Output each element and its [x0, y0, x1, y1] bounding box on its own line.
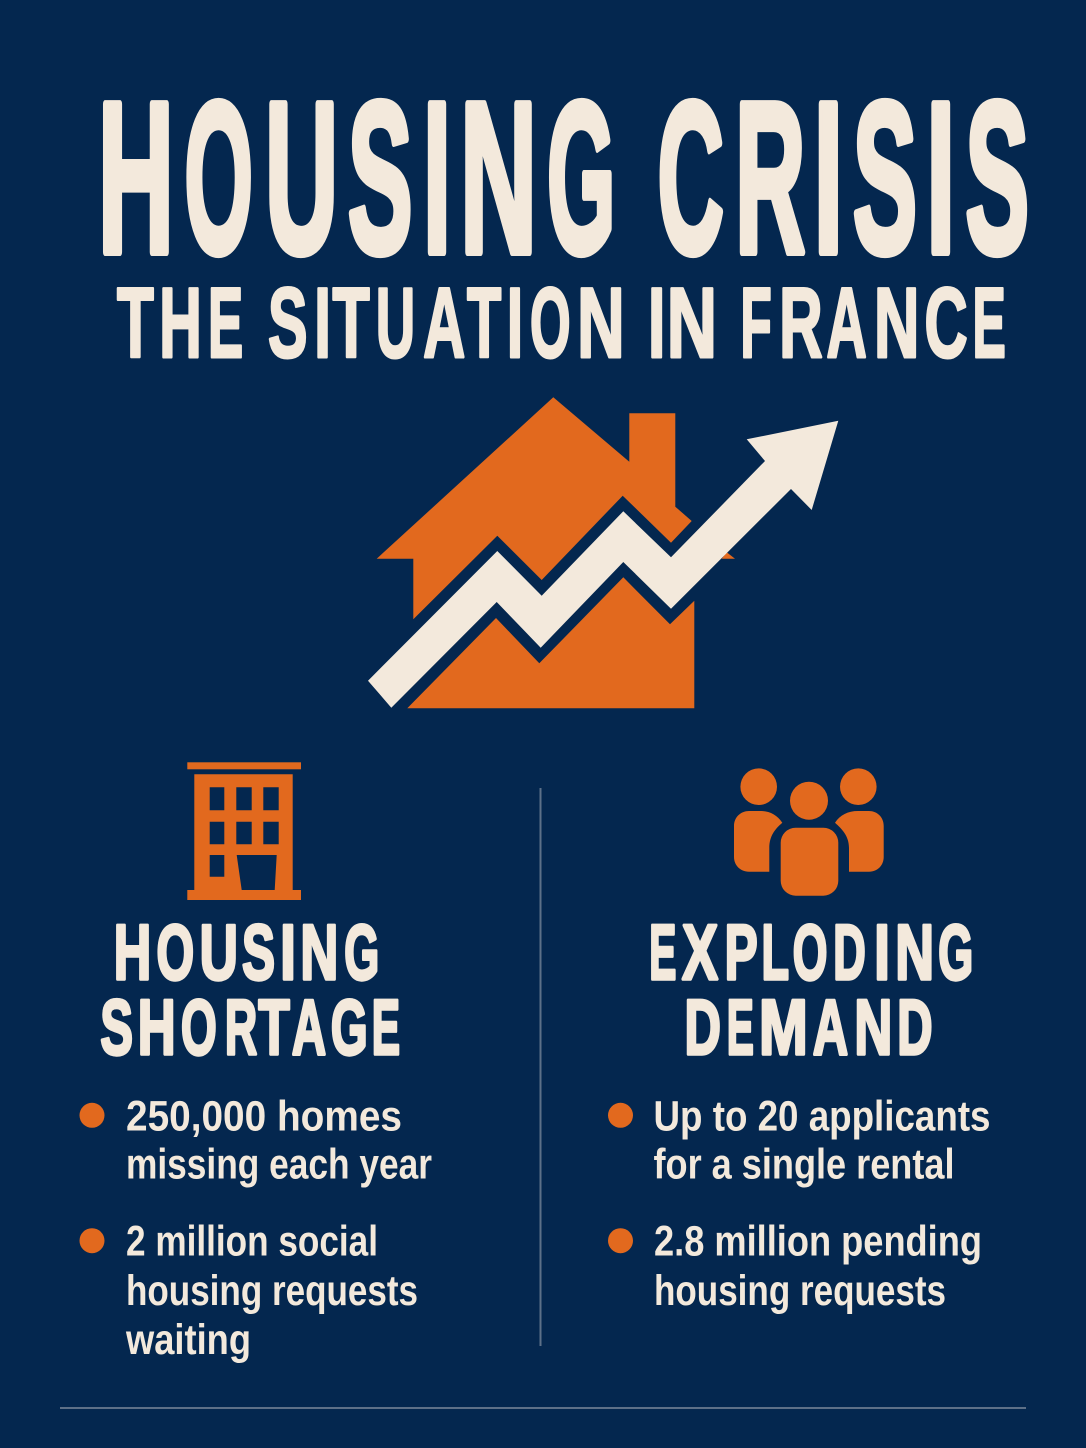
fact 2: housing requests — [126, 1267, 418, 1315]
section heading: exploding demand: N — [854, 983, 892, 1071]
subtitle — [117, 267, 1006, 378]
title: C — [658, 57, 724, 298]
fact 2: 2.8 million pending — [654, 1218, 982, 1266]
title: I — [926, 57, 955, 298]
fact 1: missing each year — [126, 1140, 432, 1188]
icon: house with rising arrow — [368, 397, 838, 708]
section heading: housing shortage: A — [292, 983, 326, 1071]
subtitle: O — [530, 267, 571, 378]
section heading: exploding demand: D — [684, 983, 721, 1071]
subtitle: E — [972, 267, 1006, 378]
section heading: exploding demand: X — [682, 908, 718, 996]
title: S — [853, 57, 917, 298]
section heading: housing shortage: U — [200, 908, 238, 996]
house eave tip — [722, 552, 735, 559]
subtitle: C — [924, 267, 968, 378]
fact 2: housing requests — [654, 1267, 946, 1315]
section heading: housing shortage: I — [280, 908, 296, 996]
section heading: housing shortage: G — [344, 908, 379, 996]
subtitle: E — [208, 267, 243, 378]
bullet 1 — [80, 1103, 104, 1128]
bullet 2 — [80, 1228, 104, 1253]
title: U — [265, 57, 338, 298]
fact 1: 250,000 homes — [126, 1093, 402, 1141]
rising arrow — [368, 421, 838, 708]
fact 2: 2 million social — [126, 1218, 378, 1266]
fact 1: Up to 20 applicants — [654, 1093, 990, 1141]
subtitle: U — [376, 267, 415, 378]
fact 2: waiting — [125, 1316, 251, 1364]
section heading: exploding demand: P — [725, 908, 758, 996]
section heading: exploding demand: A — [813, 983, 848, 1071]
section heading: exploding demand: E — [649, 908, 676, 996]
fact 2 — [654, 1218, 982, 1315]
section heading: housing shortage: N — [300, 908, 338, 996]
section heading: housing shortage: H — [138, 983, 176, 1071]
section heading: exploding demand: D — [833, 908, 866, 996]
icon: apartment building — [187, 762, 301, 900]
section heading: housing shortage: E — [372, 983, 400, 1071]
section heading: exploding demand: M — [759, 983, 808, 1071]
list: exploding demand facts — [608, 1093, 990, 1315]
fact 2 — [125, 1218, 418, 1364]
section heading: housing shortage: O — [156, 908, 194, 996]
subtitle: N — [577, 267, 625, 378]
section heading: housing shortage — [100, 908, 400, 1071]
subtitle: T — [117, 267, 154, 378]
title: H — [98, 57, 174, 298]
section heading: housing shortage: O — [181, 983, 217, 1071]
subtitle: I — [507, 267, 523, 378]
subtitle: R — [779, 267, 823, 378]
section heading: exploding demand: G — [938, 908, 973, 996]
subtitle: S — [268, 267, 308, 378]
subtitle: A — [423, 267, 465, 378]
section heading: exploding demand: N — [895, 908, 934, 996]
section heading: exploding demand: D — [897, 983, 932, 1071]
section heading: exploding demand — [649, 908, 973, 1071]
section heading: housing shortage: R — [225, 983, 257, 1071]
title — [98, 57, 1029, 298]
section heading: exploding demand: L — [762, 908, 789, 996]
subtitle: H — [159, 267, 202, 378]
fact 1: for a single rental — [654, 1140, 954, 1188]
section heading: exploding demand: O — [793, 908, 827, 996]
house lower part — [407, 577, 694, 708]
icon: group of people — [734, 768, 884, 896]
title: N — [460, 57, 537, 298]
subtitle: A — [826, 267, 867, 378]
bullet 2 — [608, 1228, 633, 1253]
section heading: exploding demand: E — [727, 983, 754, 1071]
list: housing shortage facts — [80, 1093, 432, 1364]
bullet 1 — [608, 1103, 633, 1128]
title: I — [423, 57, 451, 298]
subtitle: T — [332, 267, 370, 378]
fact 1 — [654, 1093, 990, 1188]
subtitle: I — [648, 267, 665, 378]
subtitle: I — [314, 267, 331, 378]
section heading: housing shortage: S — [242, 908, 275, 996]
subtitle: N — [667, 267, 717, 378]
house upper part — [377, 397, 692, 619]
section heading: housing shortage: G — [331, 983, 368, 1071]
section heading: housing shortage: T — [258, 983, 290, 1071]
subtitle: T — [467, 267, 501, 378]
title: O — [184, 57, 253, 298]
subtitle: F — [740, 267, 772, 378]
title: S — [348, 57, 413, 298]
title: G — [547, 57, 616, 298]
section heading: housing shortage: S — [100, 983, 133, 1071]
section heading: exploding demand: I — [874, 908, 890, 996]
fact 1 — [126, 1093, 432, 1188]
subtitle: N — [874, 267, 919, 378]
title: I — [814, 57, 843, 298]
title: R — [735, 57, 805, 298]
section heading: housing shortage: H — [114, 908, 151, 996]
